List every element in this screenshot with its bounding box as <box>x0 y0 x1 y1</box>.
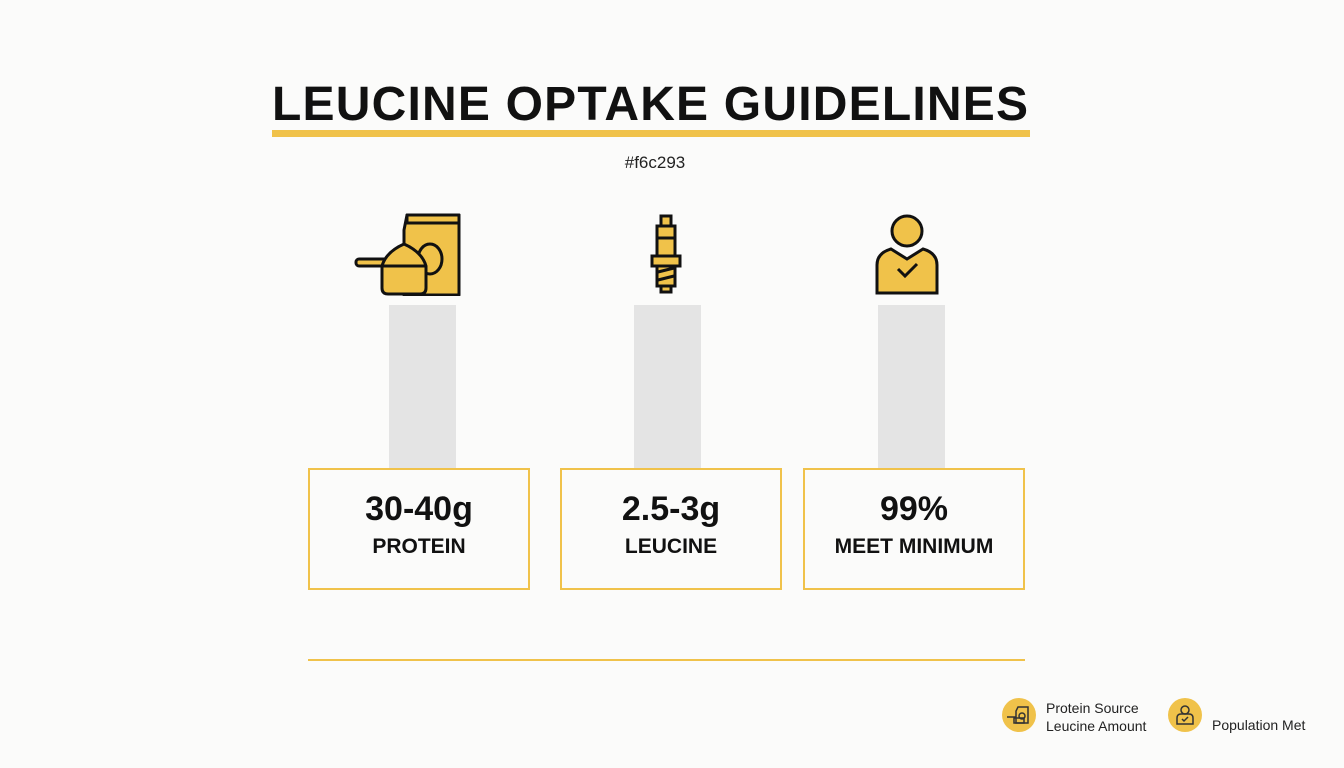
card: protein <box>308 468 530 590</box>
icon: protein powder <box>354 214 460 296</box>
card: leucine <box>560 468 782 590</box>
legend: Population Met <box>1212 717 1305 733</box>
legend: Leucine Amount <box>1046 718 1146 734</box>
card: population <box>803 468 1025 590</box>
bars <box>389 305 456 468</box>
legend <box>1002 698 1306 734</box>
card: population: MEET MINIMUM <box>835 535 993 558</box>
card: population: 99% <box>880 490 948 528</box>
card: protein: 30-40g <box>365 490 473 528</box>
legend: Protein Source <box>1046 700 1139 716</box>
title: LEUCINE OPTAKE GUIDELINES <box>272 78 1029 131</box>
subtitle: #f6c293 <box>625 153 685 172</box>
icon: person check <box>876 214 938 294</box>
divider line <box>308 659 1025 661</box>
card: leucine: 2.5-3g <box>622 490 720 528</box>
card: leucine: LEUCINE <box>625 535 717 558</box>
icon: spark plug <box>650 214 682 294</box>
card: protein: PROTEIN <box>372 535 466 558</box>
